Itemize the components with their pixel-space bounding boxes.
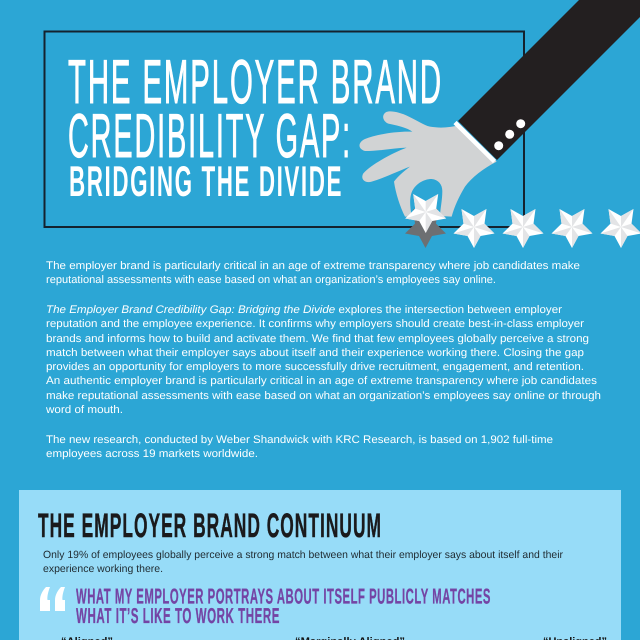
title: BRIDGING THE DIVIDE — [69, 158, 343, 206]
paragraph 2: match between what their employer says about itself and their experience working there. Closing the gap — [46, 347, 584, 359]
intro text — [45, 260, 601, 460]
paragraph 3: employees across 19 markets worldwide. — [46, 448, 258, 460]
quote text — [76, 584, 491, 628]
paragraph 1: The employer brand is particularly critical in an age of extreme transparency where job candidates make — [46, 260, 580, 272]
icon: shirt cuff — [455, 122, 494, 162]
icon: hand — [359, 111, 497, 217]
paragraph 1 — [46, 260, 580, 286]
icon: cuff buttons — [494, 119, 525, 150]
panel description — [43, 549, 563, 575]
star 1 — [454, 209, 494, 248]
paragraph 2 — [45, 304, 601, 416]
icon: quotation mark — [40, 587, 65, 611]
panel: employer brand continuum — [19, 490, 621, 640]
paragraph 2: word of mouth. — [45, 404, 123, 416]
icon: shadow star — [405, 209, 446, 248]
paragraph 2: reputation and the employee experience. It confirms why employers should create best-in-class employer — [46, 318, 584, 330]
paragraph 1: reputational assessments with ease based on what an organization’s employees say online. — [46, 274, 496, 286]
title box — [44, 32, 524, 227]
paragraph 2: An authentic employer brand is particularly critical in an age of extreme transparency where job candidates — [46, 375, 598, 387]
quote text: WHAT IT’S LIKE TO WORK THERE — [76, 604, 280, 628]
paragraph 2: provides an opportunity for employers to more successfully drive recruitment, engagement, and retention. — [46, 361, 584, 373]
icon: star row — [454, 209, 640, 248]
paragraph 2: make reputational assessments with ease based on what an organization’s employees say online or through — [46, 390, 601, 402]
paragraph 2: The Employer Brand Credibility Gap: Bridging the Divide explores the intersection between employer — [46, 304, 562, 316]
star 3 — [552, 209, 592, 248]
paragraph 3: The new research, conducted by Weber Shandwick with KRC Research, is based on 1,902 full-time — [46, 434, 553, 446]
illustration: hand placing star — [359, 0, 640, 248]
star 2 — [502, 209, 544, 248]
continuum labels — [61, 636, 607, 640]
paragraph 2: brands and informs how to build and activate them. We find that few employees globally perceive a strong — [46, 333, 589, 345]
icon: suit sleeve — [458, 0, 640, 160]
title — [68, 48, 443, 206]
panel description: experience working there. — [43, 563, 163, 575]
icon: held star — [405, 194, 446, 233]
panel description: Only 19% of employees globally perceive a strong match between what their employer says about itself and their — [43, 549, 563, 561]
star 4 — [600, 209, 640, 248]
paragraph 3 — [46, 434, 553, 460]
